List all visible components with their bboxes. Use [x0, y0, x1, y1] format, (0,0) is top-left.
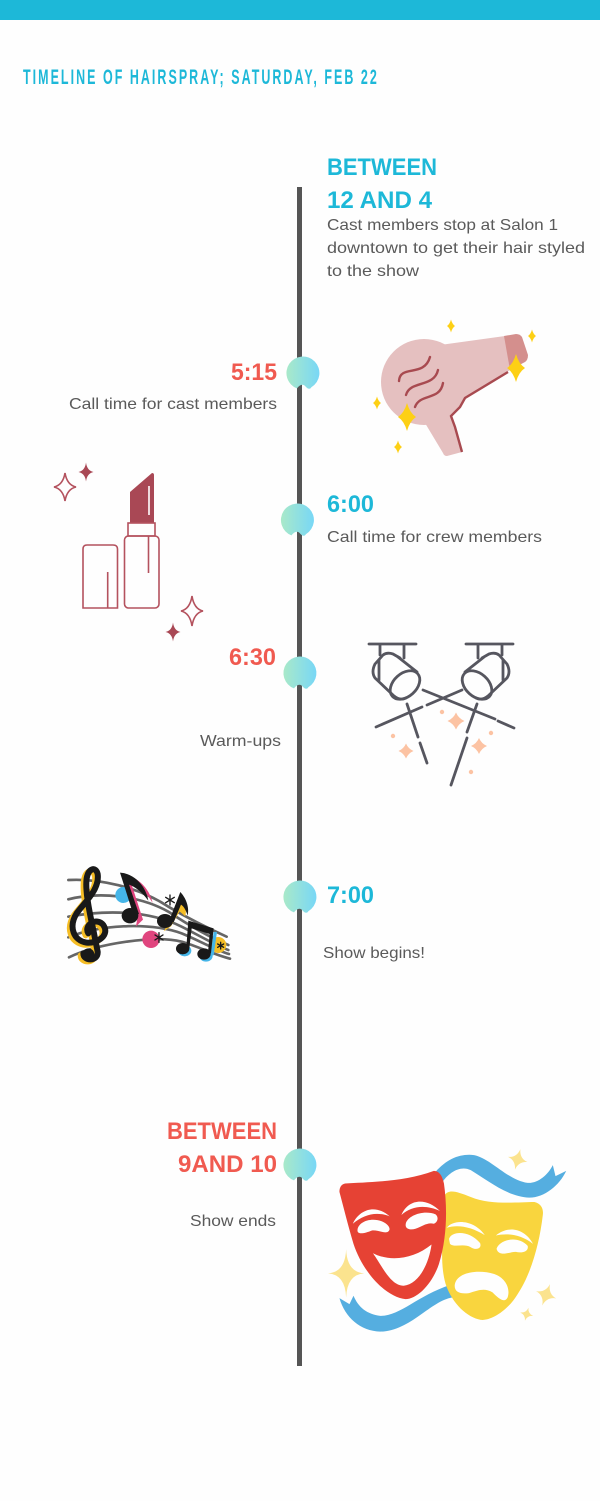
entry: 6:00	[327, 491, 542, 546]
entry: between 12 and 4	[327, 154, 585, 280]
timeline marker 6:00	[281, 504, 314, 536]
entry: 6:30: 6:30	[229, 644, 276, 671]
entry: between 12 and 4: BETWEEN	[327, 154, 437, 181]
timeline marker 5:15	[286, 357, 319, 389]
icon: music notes	[68, 869, 230, 962]
icon: lipstick	[54, 462, 203, 642]
timeline marker 9 and 10	[283, 1149, 316, 1181]
entry: between 9 and 10: BETWEEN	[167, 1118, 277, 1145]
entry: 5:15: 5:15	[231, 359, 277, 386]
timeline marker 7:00	[283, 881, 316, 913]
entry: 6:00: Call time for crew members	[327, 529, 542, 546]
icon: stage spotlights	[369, 644, 514, 785]
entry: between 12 and 4: downtown to get their hair styled	[327, 240, 585, 257]
entry: 6:30	[200, 644, 281, 750]
entry: between 12 and 4: Cast members stop at Salon 1	[327, 217, 558, 234]
entry: 5:15	[69, 359, 277, 413]
icon: hair dryer	[373, 320, 536, 456]
icon: theatre masks	[328, 1146, 566, 1332]
entry: 6:00: 6:00	[327, 491, 374, 518]
timeline marker 6:30	[283, 657, 316, 689]
top banner	[0, 0, 600, 20]
entry: between 9 and 10: 9AND 10	[178, 1151, 277, 1178]
timeline axis	[297, 187, 302, 1366]
title: TIMELINE OF HAIRSPRAY; SATURDAY, FEB 22	[23, 64, 377, 89]
entry: 7:00: 7:00	[327, 882, 374, 909]
entry: 7:00	[323, 882, 425, 962]
entry: between 12 and 4: to the show	[327, 263, 420, 280]
entry: between 12 and 4: 12 AND 4	[327, 187, 433, 214]
entry: 6:30: Warm-ups	[200, 733, 281, 750]
entry: between 9 and 10	[167, 1118, 277, 1230]
entry: between 9 and 10: Show ends	[190, 1213, 276, 1230]
entry: 5:15: Call time for cast members	[69, 396, 277, 413]
entry: 7:00: Show begins!	[323, 945, 425, 962]
